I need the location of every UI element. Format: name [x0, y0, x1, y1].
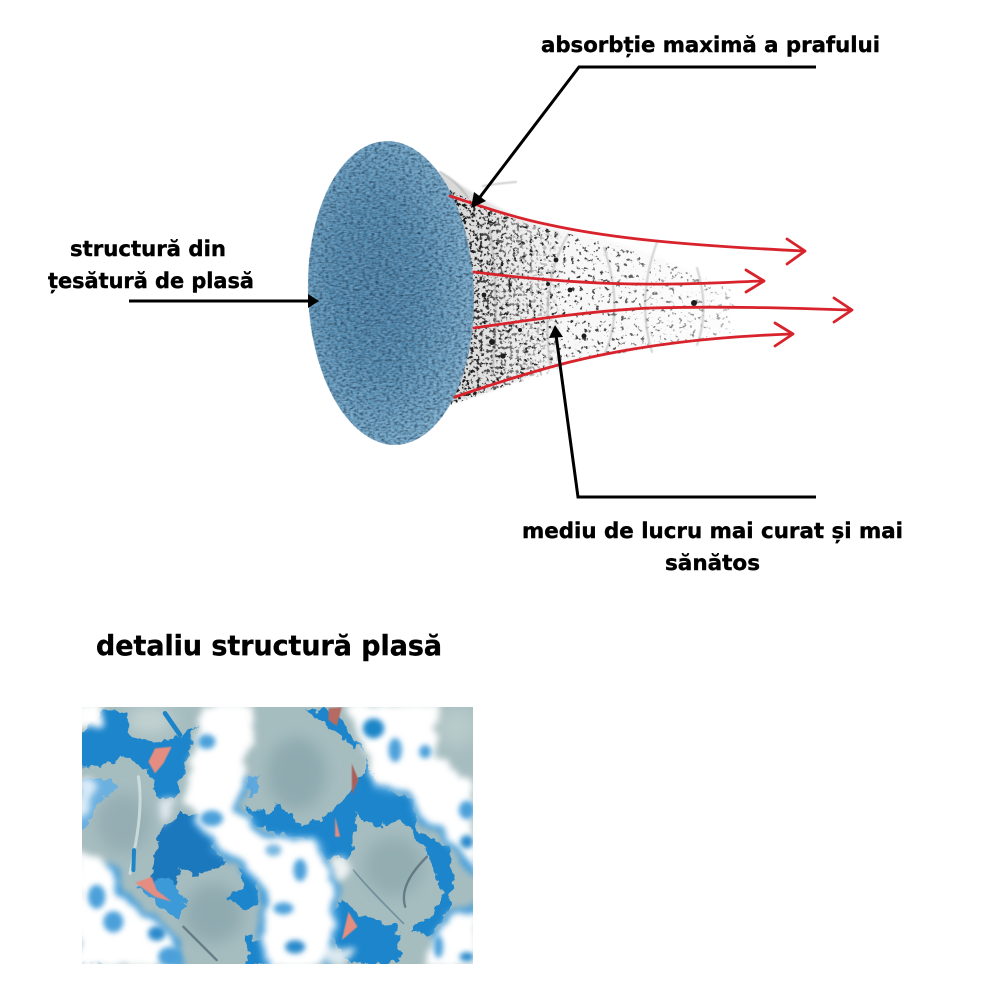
- label: maximum dust absorption: absorbție maximă a prafului: [541, 33, 880, 58]
- salmon patches: [135, 707, 358, 940]
- heading: mesh detail: detaliu structură plasă: [96, 629, 442, 662]
- callout arrow: mesh structure: [129, 294, 319, 308]
- white dust deposits: [77, 703, 477, 967]
- blue spots on dust: [88, 718, 475, 967]
- callout arrow: absorption: [471, 67, 816, 208]
- illustration: airflow through mesh filter: [303, 138, 852, 448]
- callout arrow: cleaner environment: [549, 325, 816, 497]
- red airflow arrow 3: [474, 298, 852, 328]
- photo: mesh structure close-up: [77, 703, 477, 967]
- mesh fabric disc: [303, 138, 479, 448]
- label: mesh fabric structure: țesătură de plasă: [48, 269, 254, 294]
- red airflow arrow 4: [455, 323, 793, 397]
- label: mesh fabric structure: structură din: [70, 237, 226, 262]
- thin transparent filaments: [130, 713, 427, 960]
- label: cleaner working environment: mediu de lucru mai curat și mai: [522, 519, 903, 544]
- red airflow arrow 1: [450, 196, 805, 264]
- photo background shading: [97, 707, 477, 943]
- dust cloud cone: [440, 172, 735, 405]
- label: cleaner working environment: sănătos: [665, 551, 760, 576]
- red airflow arrow 2: [474, 270, 764, 292]
- blue mesh strands: [80, 710, 454, 963]
- blue edge around dust deposits: [107, 777, 477, 967]
- label: cleaner working environment: [522, 519, 903, 576]
- label: mesh fabric structure: [48, 237, 254, 294]
